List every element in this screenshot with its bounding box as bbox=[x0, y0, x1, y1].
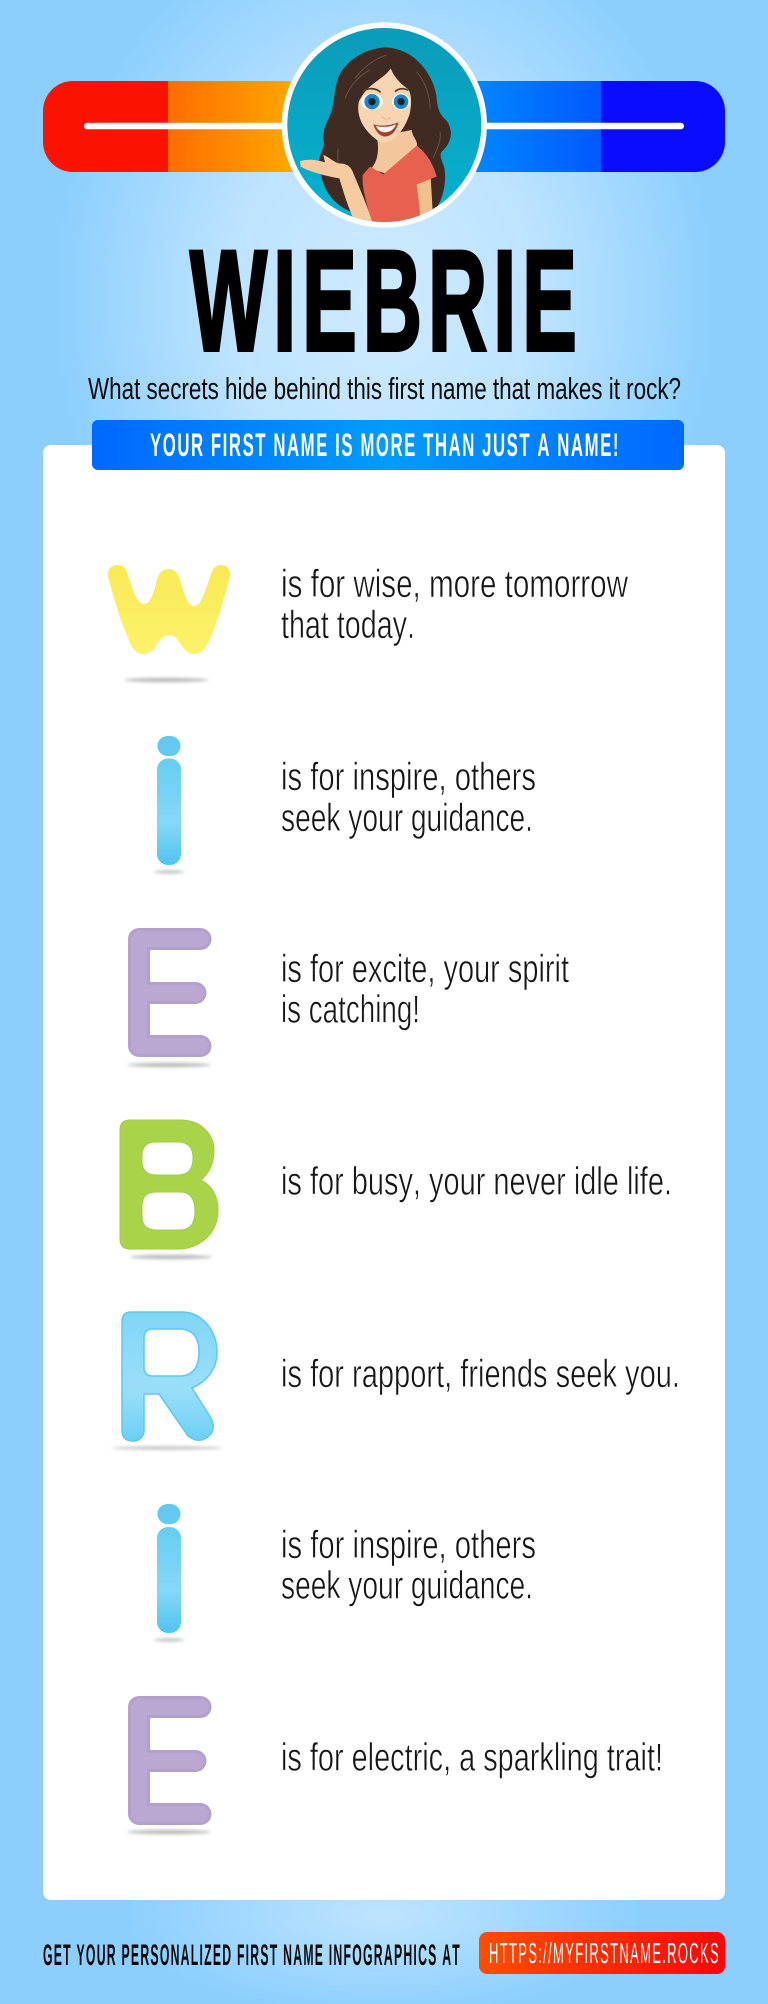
text: W meaning: that today. bbox=[281, 604, 415, 647]
icon: letter W bbox=[108, 565, 230, 682]
face bbox=[358, 68, 411, 142]
banner bbox=[92, 420, 684, 470]
shirt bbox=[363, 146, 437, 225]
eyes bbox=[361, 94, 383, 110]
row: W bbox=[108, 563, 629, 682]
row: B bbox=[120, 1120, 672, 1259]
text: I meaning bbox=[281, 756, 536, 840]
mouth bbox=[373, 122, 398, 137]
row: I bbox=[154, 736, 536, 874]
text: E meaning: is catching! bbox=[281, 988, 420, 1032]
footer url button bbox=[479, 1932, 725, 1974]
icon: second letter E bbox=[127, 1707, 211, 1834]
text: E meaning: is for excite, your spirit bbox=[281, 948, 569, 991]
nose bbox=[382, 117, 391, 119]
text: E meaning bbox=[281, 948, 569, 1032]
text: I meaning: seek your guidance. bbox=[281, 797, 533, 840]
row: second I bbox=[154, 1504, 536, 1642]
icon: letter E bbox=[127, 939, 211, 1067]
text: second I meaning: is for inspire, others bbox=[281, 1524, 536, 1567]
neck bbox=[371, 130, 417, 173]
header bar bbox=[43, 81, 725, 172]
row: R bbox=[112, 1312, 680, 1450]
left arm and hand bbox=[300, 155, 373, 224]
text: I meaning: is for inspire, others bbox=[281, 756, 536, 799]
eyebrows bbox=[363, 89, 408, 92]
text: W meaning bbox=[281, 563, 629, 647]
text: second I meaning bbox=[281, 1524, 536, 1608]
icon: letter i bbox=[154, 736, 184, 874]
text: second I meaning: seek your guidance. bbox=[281, 1564, 533, 1608]
portrait of woman in circle bbox=[282, 22, 487, 228]
icon: letter R bbox=[112, 1312, 222, 1450]
row: second E bbox=[127, 1707, 663, 1834]
hair highlights bbox=[337, 54, 441, 164]
panel: white content card bbox=[43, 445, 725, 1900]
text: W meaning: is for wise, more tomorrow bbox=[281, 563, 629, 606]
row: E bbox=[127, 939, 569, 1067]
right arm bbox=[412, 178, 432, 218]
icon: second letter i bbox=[154, 1504, 184, 1642]
hair bbox=[319, 47, 451, 215]
icon: letter B bbox=[120, 1120, 218, 1259]
